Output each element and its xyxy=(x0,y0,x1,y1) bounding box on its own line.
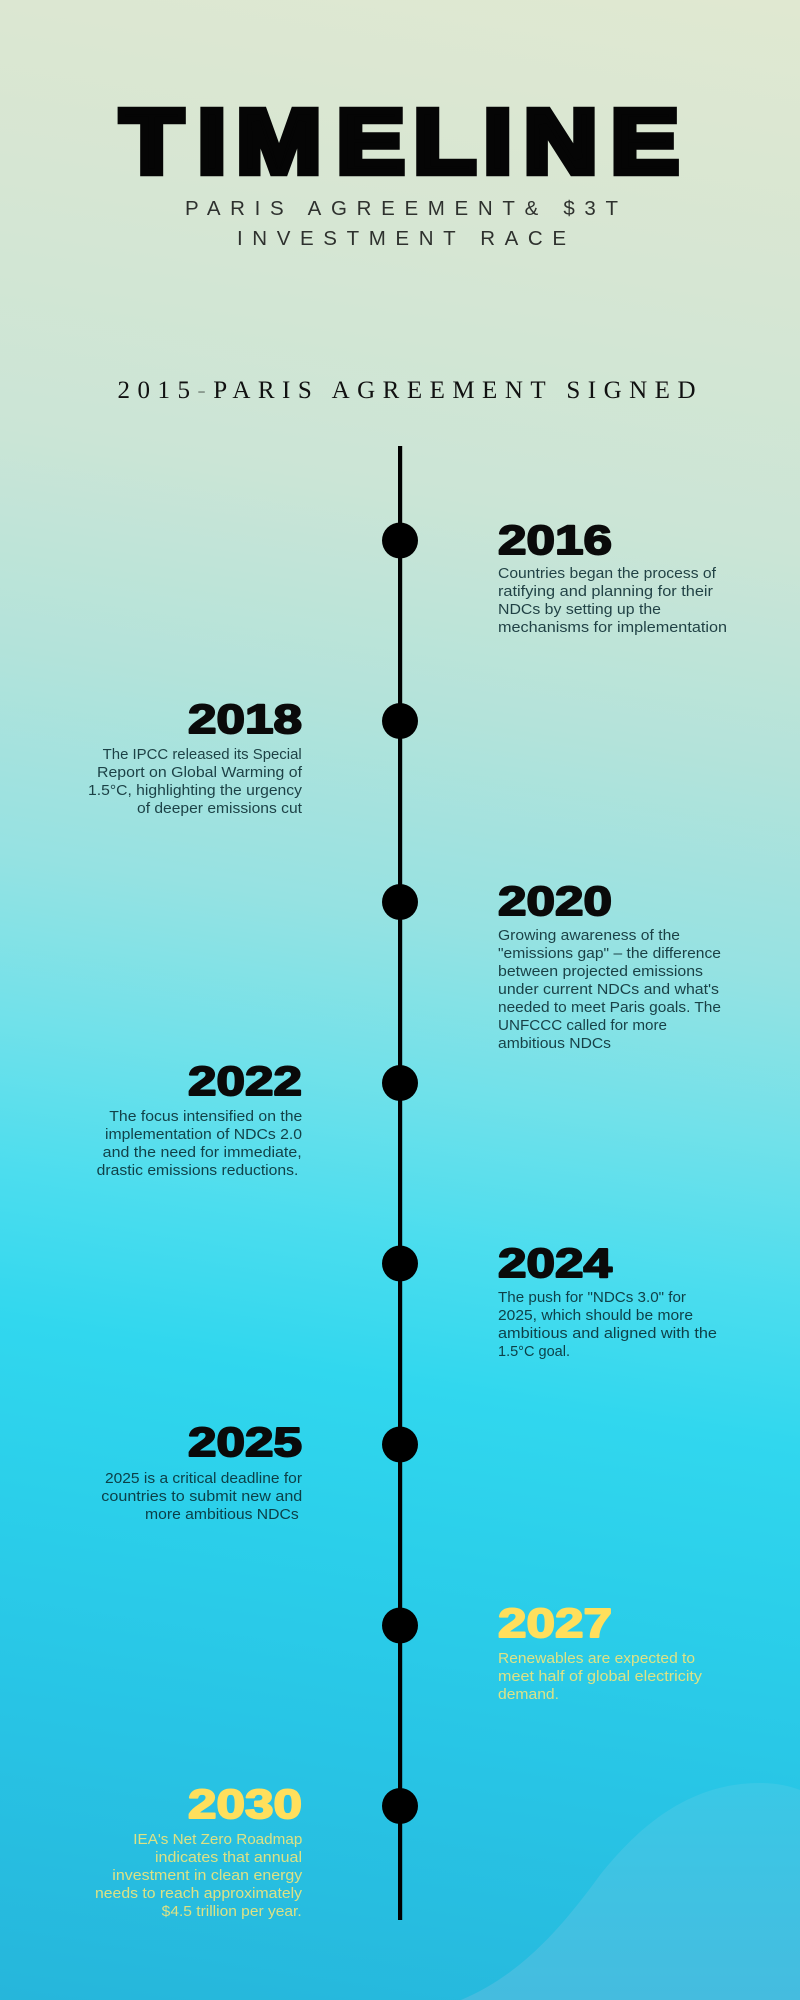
event: 2020: needed to meet Paris goals. The xyxy=(498,1000,721,1016)
event: 2018: 1.5°C, highlighting the urgency xyxy=(88,783,303,799)
event: 2022: 2022 xyxy=(188,1058,302,1104)
event: 2025: countries to submit new and xyxy=(101,1489,302,1505)
event: 2030: $4.5 trillion per year. xyxy=(162,1904,302,1920)
event: 2027: meet half of global electricity xyxy=(498,1669,703,1685)
event: 2030: investment in clean energy xyxy=(112,1868,303,1884)
subtitle: INVESTMENT RACE xyxy=(237,227,566,250)
event: 2030: IEA's Net Zero Roadmap xyxy=(133,1832,302,1848)
event: 2020: Growing awareness of the xyxy=(498,928,680,944)
event: 2030 xyxy=(95,1781,303,1920)
event: 2022 xyxy=(97,1058,302,1179)
event: 2018: of deeper emissions cut xyxy=(137,801,302,817)
event: 2024 xyxy=(498,1240,717,1360)
event: 2030: needs to reach approximately xyxy=(95,1886,303,1902)
event: 2022: The focus intensified on the xyxy=(109,1109,302,1125)
event: 2030: 2030 xyxy=(188,1781,302,1827)
event: 2020 xyxy=(498,878,721,1052)
event: 2027: demand. xyxy=(498,1687,559,1703)
event: 2027: 2027 xyxy=(498,1600,612,1646)
title: TIMELINE xyxy=(121,92,679,192)
event: 2018 xyxy=(88,696,303,817)
timeline axis xyxy=(398,446,402,1920)
event: 2020: UNFCCC called for more xyxy=(498,1018,667,1034)
event: 2016 xyxy=(498,517,727,636)
event: 2020: 2020 xyxy=(498,878,612,924)
event: 2025: 2025 is a critical deadline for xyxy=(105,1471,302,1487)
event: 2024: 1.5°C goal. xyxy=(498,1344,570,1360)
event: 2024: 2025, which should be more xyxy=(498,1308,693,1324)
event: 2025: 2025 xyxy=(188,1419,302,1465)
subtitle xyxy=(185,197,618,250)
event: 2024: The push for "NDCs 3.0" for xyxy=(498,1290,686,1306)
event: 2018: 2018 xyxy=(188,696,302,742)
event: 2024: 2024 xyxy=(498,1240,612,1286)
event: 2020: ambitious NDCs xyxy=(498,1036,611,1052)
event: 2025: more ambitious NDCs xyxy=(145,1507,299,1523)
event: 2018: The IPCC released its Special xyxy=(103,747,302,763)
subtitle: PARIS AGREEMENT& $3T xyxy=(185,197,618,220)
event: 2025 xyxy=(101,1419,302,1523)
event: 2020: under current NDCs and what's xyxy=(498,982,719,998)
event: 2027: Renewables are expected to xyxy=(498,1651,695,1667)
decorative wave, bottom right xyxy=(461,1783,800,2000)
event: 2027 xyxy=(498,1600,703,1703)
event: 2022: drastic emissions reductions. xyxy=(97,1163,298,1179)
event: 2016: 2016 xyxy=(498,517,612,563)
event: 2016: ratifying and planning for their xyxy=(498,584,713,600)
event: 2022: and the need for immediate, xyxy=(103,1145,302,1161)
timeline dots xyxy=(382,522,418,1824)
event: 2024: ambitious and aligned with the xyxy=(498,1326,717,1342)
event: 2016: Countries began the process of xyxy=(498,566,717,582)
event: 2020: "emissions gap" – the difference xyxy=(498,946,721,962)
event: 2018: Report on Global Warming of xyxy=(97,765,303,781)
event: 2022: implementation of NDCs 2.0 xyxy=(105,1127,302,1143)
event: 2020: between projected emissions xyxy=(498,964,703,980)
event: 2016: NDCs by setting up the xyxy=(498,602,661,618)
heading: 2015 Paris Agreement signed: 2015 - PARIS AGREEMENT SIGNED xyxy=(118,377,696,404)
event: 2030: indicates that annual xyxy=(155,1850,302,1866)
event: 2016: mechanisms for implementation xyxy=(498,620,727,636)
